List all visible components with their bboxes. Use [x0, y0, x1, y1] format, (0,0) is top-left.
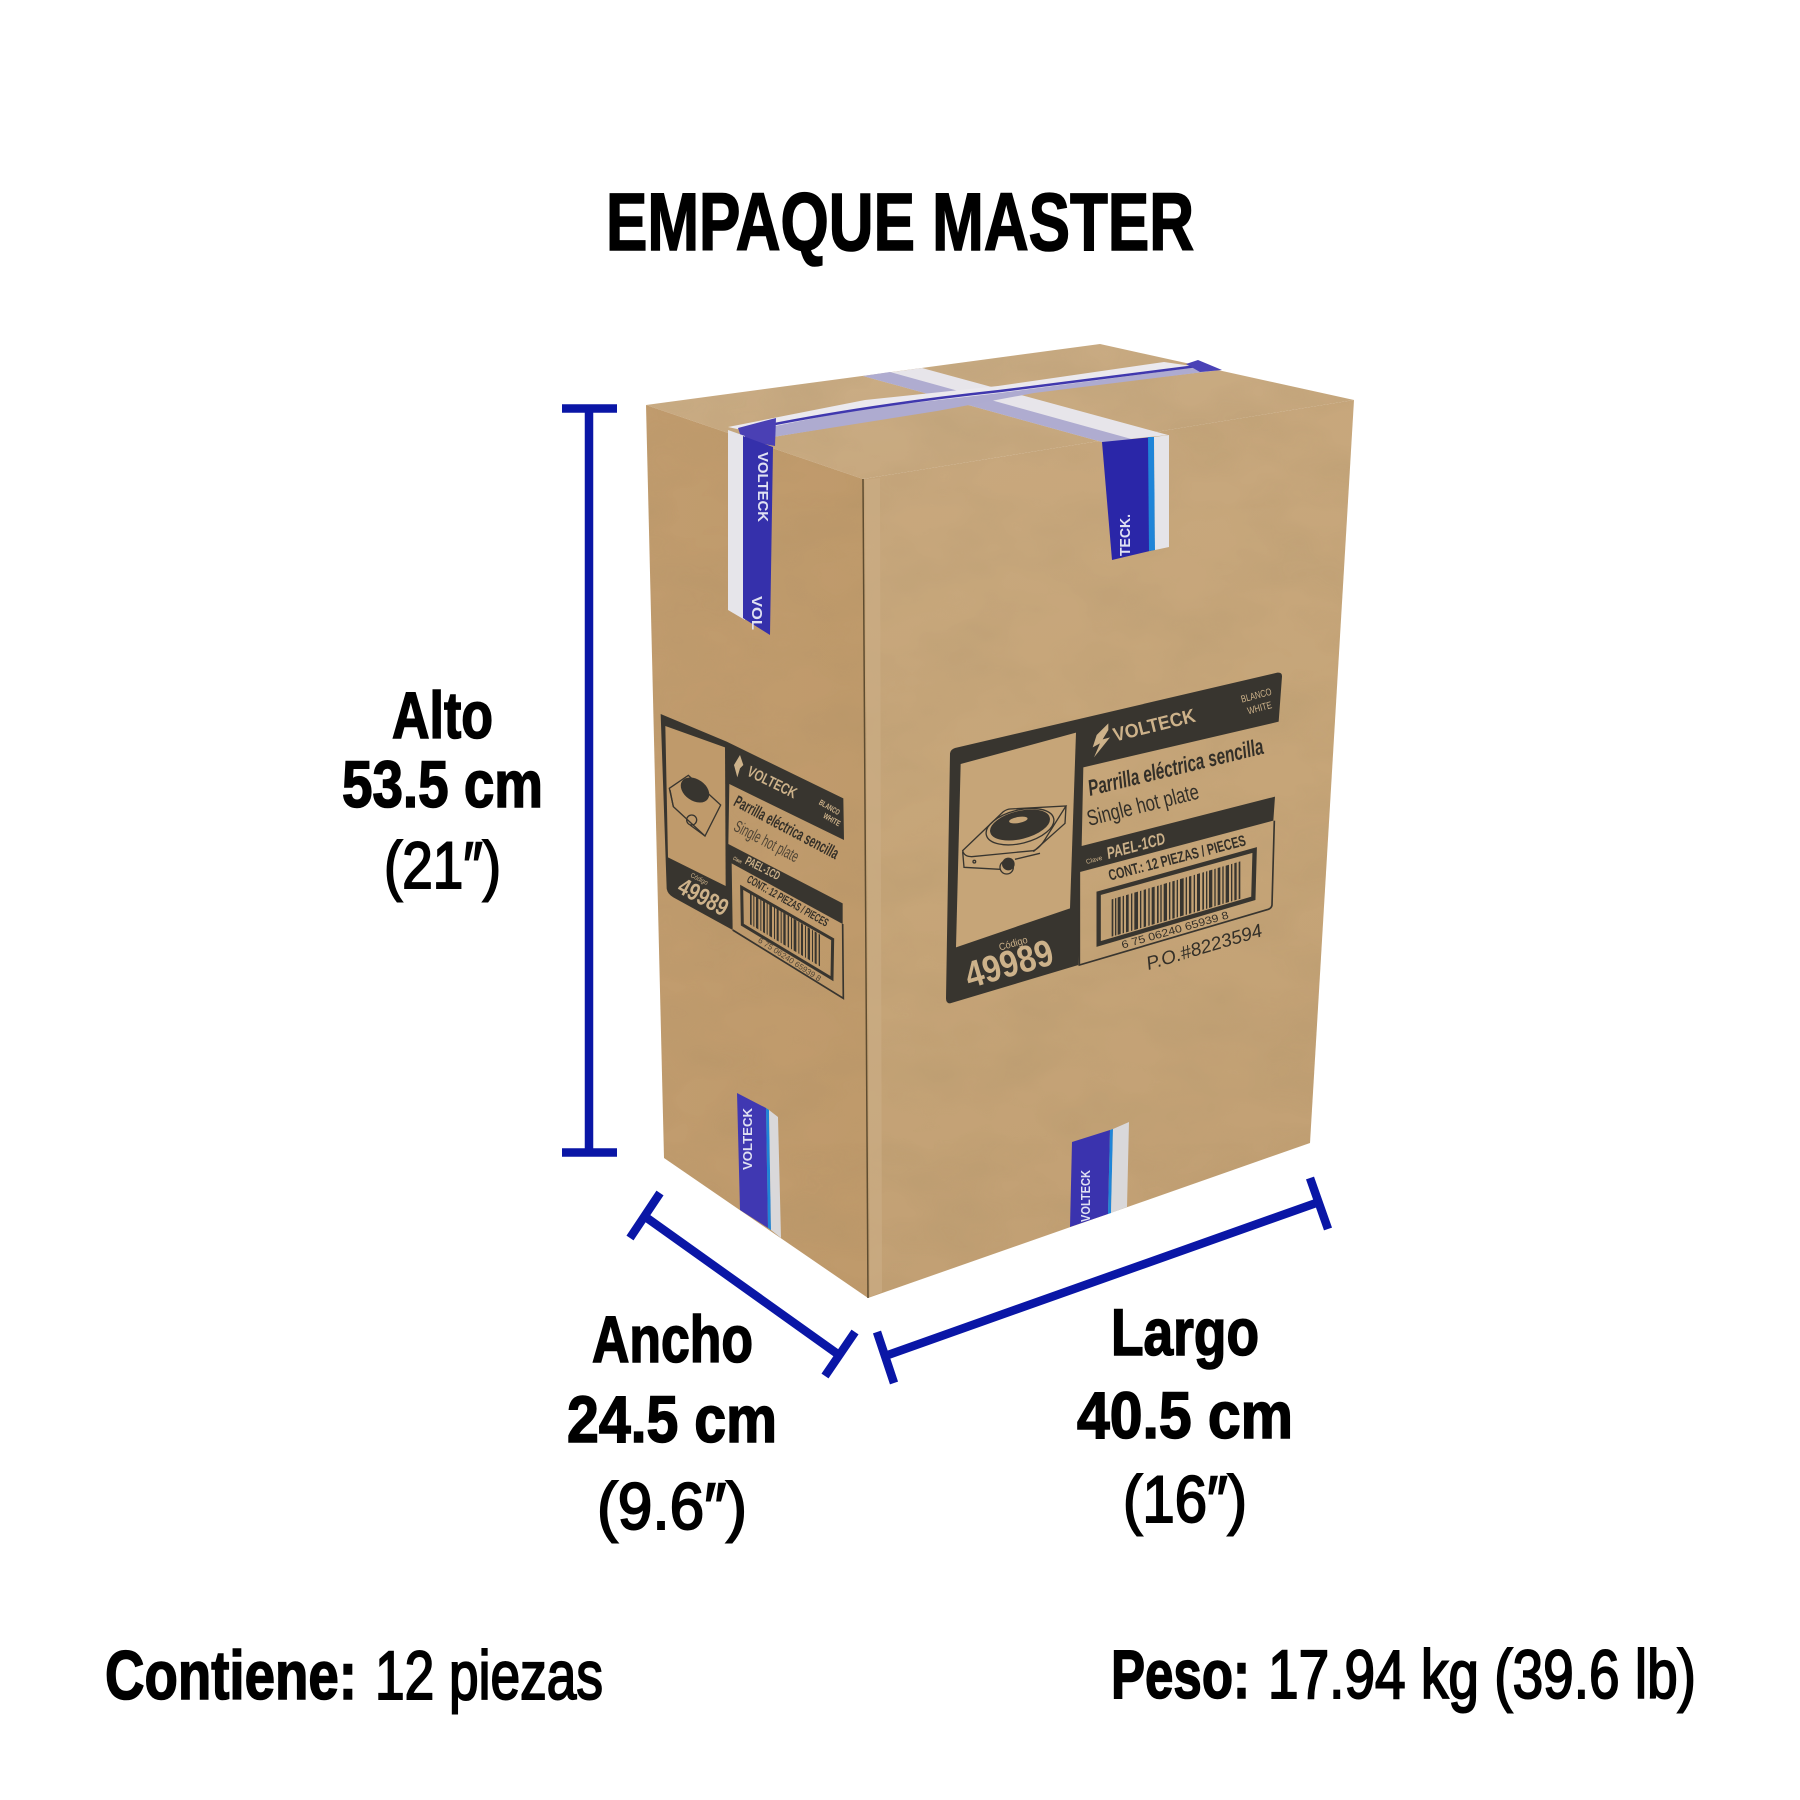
product name english: Single hot plate [1084, 779, 1201, 831]
barcode [1099, 850, 1255, 944]
tape on left face lower [737, 1093, 781, 1238]
codigo caption: Código [689, 872, 709, 887]
code number: 49989 [673, 873, 733, 922]
length label [1077, 1295, 1293, 1536]
width label [567, 1302, 777, 1543]
tape on left face upper: VOLTECK [754, 452, 771, 522]
contents note [105, 1637, 603, 1714]
width label: 24.5 cm [567, 1382, 777, 1456]
tape on front face upper [1102, 435, 1169, 560]
height label: 53.5 cm [342, 747, 543, 821]
box top face [646, 344, 1354, 479]
product label on left face [661, 714, 844, 998]
box left face [646, 405, 868, 1298]
width label: Ancho [592, 1302, 753, 1376]
barcode [742, 887, 833, 979]
contents note: Contiene: [105, 1637, 357, 1714]
length label: 40.5 cm [1077, 1378, 1293, 1452]
tape on front face lower: VOLTECK [1078, 1169, 1093, 1222]
weight note: Peso: [1111, 1636, 1250, 1713]
image window [665, 726, 726, 886]
colour label [817, 798, 842, 828]
colour label [1240, 687, 1274, 717]
barcode number: 6 75 06240 65939 8 [1120, 909, 1230, 952]
length dimension bar [877, 1178, 1328, 1383]
box front face [863, 400, 1354, 1298]
infographic: master carton dimensions [106, 192, 1694, 1714]
clave: Clave [1085, 855, 1104, 866]
tape on top face [728, 360, 1222, 446]
colour label: BLANCO [1240, 687, 1273, 706]
height label: Alto [392, 678, 493, 752]
box corner edge [863, 479, 868, 1298]
purchase order: P.O.#8223594 [1144, 920, 1265, 974]
product name: Parrilla eléctrica sencilla [1085, 733, 1266, 801]
colour label: BLANCO [817, 798, 841, 817]
image window [956, 733, 1076, 947]
height label: (21″) [384, 828, 501, 902]
contents note: 12 piezas [375, 1637, 603, 1714]
height dimension bar [562, 408, 617, 1153]
code number: 49989 [960, 931, 1058, 996]
contents: CONT.: 12 PIEZAS / PIECES [745, 874, 830, 930]
product name: Parrilla eléctrica sencilla [731, 792, 843, 863]
contents: CONT.: 12 PIEZAS / PIECES [1107, 832, 1248, 885]
cardboard box [640, 340, 1360, 1300]
weight note [1111, 1636, 1696, 1713]
hot plate drawing [963, 802, 1066, 874]
clave: Clave [732, 856, 743, 865]
lower panel outline [733, 924, 843, 998]
brand name: VOLTECK [1111, 706, 1198, 747]
product name english: Single hot plate [731, 817, 802, 866]
codigo caption: Código [998, 935, 1029, 954]
width dimension bar [630, 1193, 855, 1376]
height label [342, 678, 543, 902]
length label: Largo [1111, 1295, 1259, 1369]
tape on front face lower [1070, 1122, 1129, 1227]
label dark frame and bands [946, 673, 1282, 1003]
logo bolt [1093, 723, 1110, 757]
title: EMPAQUE MASTER [606, 177, 1194, 268]
tape on left face upper: VOL [748, 596, 765, 630]
hot plate drawing [669, 773, 721, 836]
barcode number: 6 75 06240 65939 8 [756, 936, 823, 984]
model: PAEL-1CD [743, 854, 783, 883]
length label: (16″) [1123, 1462, 1247, 1536]
colour label: WHITE [1246, 700, 1274, 717]
tape on left face upper [728, 430, 773, 635]
label dark frame and bands [661, 714, 844, 930]
colour label: WHITE [822, 811, 842, 828]
model: PAEL-1CD [1104, 829, 1167, 863]
weight note: 17.94 kg (39.6 lb) [1268, 1636, 1696, 1713]
lower panel outline [1079, 821, 1274, 965]
logo bolt [734, 755, 743, 777]
tape on left face lower: VOLTECK [740, 1107, 755, 1170]
brand name: VOLTECK [744, 763, 800, 802]
product label on front face [946, 673, 1282, 1003]
width label: (9.6″) [597, 1469, 747, 1543]
tape on front face upper: TECK. [1117, 514, 1134, 556]
